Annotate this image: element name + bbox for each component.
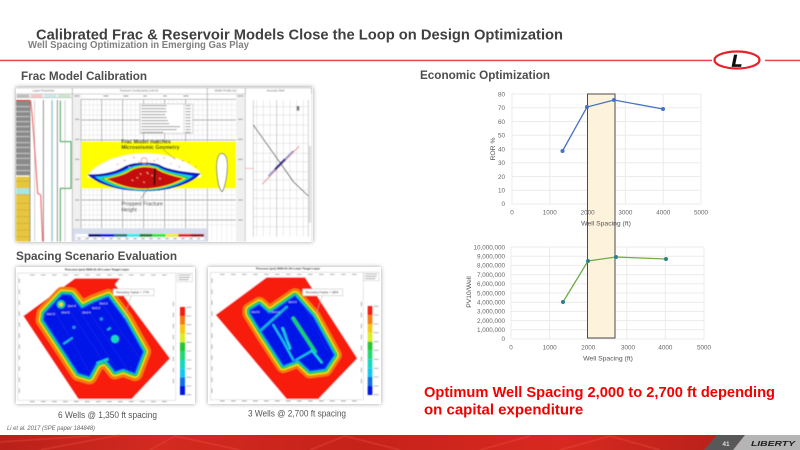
chart: PV10 vs well spacing: 1,000,000 <box>477 327 505 334</box>
heading: spacing scenario evaluation: Spacing Scenario Evaluation <box>16 249 177 263</box>
label: frac model matches: Frac Model matches <box>121 139 171 145</box>
depleted-area details <box>53 300 140 373</box>
pressure contours <box>250 296 334 371</box>
series: PV10 line <box>561 255 668 304</box>
callout: optimum well spacing: Optimum Well Spacing 2,000 to 2,700 ft depending <box>424 384 775 401</box>
chart: PV10 vs well spacing: 3000 <box>621 344 635 352</box>
chart: PV10 vs well spacing: 2000 <box>581 344 596 352</box>
chart: PV10 vs well spacing: 5,000,000 <box>477 290 505 298</box>
chart: PV10 vs well spacing: Well Spacing (ft) <box>583 356 633 362</box>
x-axis labels over highlight <box>581 210 631 228</box>
chart: PV10 vs well spacing: 0 <box>509 344 513 352</box>
well labels <box>251 300 297 314</box>
pressure colour scale <box>364 272 379 395</box>
pressure colour scale <box>177 273 192 395</box>
panel: 6 wells pressure map <box>16 267 195 404</box>
footer band <box>0 435 800 450</box>
page number tab: 41 <box>722 441 730 448</box>
label: propped fracture height: Height <box>121 208 137 214</box>
conductivity track grid: Acoustic Well <box>267 89 285 93</box>
conductivity track grid: Width Profile (in) <box>215 89 237 93</box>
title: Calibrated Frac & Reservoir Models Close the Loop on Design Optimization <box>36 28 563 44</box>
width profile shape <box>217 153 227 192</box>
panel: 6 wells pressure map: Pressure (psi) 2066-01-26 Lower Target Layer <box>65 268 130 272</box>
chart: ROR vs well spacing: 50 <box>498 132 505 140</box>
chart: PV10 vs well spacing: 3,000,000 <box>477 308 505 316</box>
chart: PV10 vs well spacing: 5000 <box>697 344 711 352</box>
brand tab <box>733 435 800 450</box>
conductivity track grid: Fracture Conductivity (mD-ft) <box>120 89 158 93</box>
callout: recovery factor 68% <box>303 289 343 317</box>
conductivity track grid <box>16 88 312 242</box>
chart: ROR vs well spacing: 4000 <box>656 210 671 216</box>
panel: 3 wells pressure map <box>208 267 381 404</box>
chart: ROR vs well spacing: ROR % <box>490 137 497 161</box>
chart: PV10 vs well spacing: 6,000,000 <box>477 281 505 288</box>
optimum range highlight <box>588 94 615 338</box>
red reservoir area <box>216 277 357 399</box>
chart: ROR vs well spacing: 70 <box>498 105 505 112</box>
chart: ROR vs well spacing: 40 <box>498 146 505 154</box>
well labels: Well 6 <box>47 312 55 316</box>
chart: PV10 vs well spacing: 8,000,000 <box>477 262 505 270</box>
callout: optimum well spacing: on capital expenditure <box>424 402 583 418</box>
well labels: Well 3 <box>99 301 108 305</box>
chart: PV10 vs well spacing: PV10/Well <box>466 276 473 308</box>
chart: PV10 vs well spacing: 0 <box>501 336 505 343</box>
acoustic well track <box>246 94 312 242</box>
yellow microseismic band <box>81 142 236 188</box>
chart: ROR vs well spacing: 0 <box>510 210 514 216</box>
chart: PV10 vs well spacing: 4000 <box>658 344 673 352</box>
callout: recovery factor 68%: Recovery Factor = 68% <box>305 290 339 294</box>
pressure contours <box>43 294 143 377</box>
callout: recovery factor 77% <box>113 289 154 318</box>
chart: ROR vs well spacing: 5000 <box>694 210 708 216</box>
panel: 3 wells pressure map: Pressure (psi) 2066-01-26 Lower Target Layer <box>256 267 321 271</box>
brand tab: LIBERTY <box>751 439 796 448</box>
leader lines <box>141 149 174 199</box>
chart: PV10 vs well spacing: 9,000,000 <box>477 254 505 260</box>
chart: ROR vs well spacing: 10 <box>498 188 505 194</box>
chart: ROR vs well spacing <box>490 92 708 216</box>
source citation: Li et al. 2017 (SPE paper 184848) <box>7 425 95 432</box>
panel: frac model screenshot <box>16 87 313 242</box>
results table <box>140 104 193 133</box>
chart: PV10 vs well spacing: 7,000,000 <box>477 272 505 279</box>
well labels: Well 4 <box>82 311 91 315</box>
series: ROR line <box>560 98 665 153</box>
well labels: Well 5 <box>251 310 260 314</box>
label: propped fracture height: Propped Fracture <box>121 201 163 207</box>
chart: PV10 vs well spacing: 4,000,000 <box>477 300 505 306</box>
propped height marker <box>152 168 157 185</box>
icon: company logo <box>714 52 760 70</box>
well labels: Well 3 <box>288 300 297 304</box>
red reservoir area <box>23 278 170 399</box>
well labels: Well 4 <box>68 304 76 308</box>
chart: PV10 vs well spacing: 1000 <box>543 344 557 352</box>
well labels <box>47 301 108 316</box>
well labels: Well 5 <box>61 311 70 315</box>
caption: 3 wells: 3 Wells @ 2,700 ft spacing <box>248 408 346 420</box>
x-axis labels over highlight: Well Spacing (ft) <box>581 220 631 228</box>
chart: ROR vs well spacing: 80 <box>498 92 505 98</box>
chart: ROR vs well spacing: 1000 <box>543 210 557 216</box>
page number tab <box>704 435 745 450</box>
chart: ROR vs well spacing: 30 <box>498 160 505 167</box>
x-axis labels over highlight: 2000 <box>581 210 595 216</box>
frac geometry lens <box>87 153 201 191</box>
layer properties track: Layer Properties <box>33 89 55 93</box>
chart: ROR vs well spacing: 20 <box>498 174 505 181</box>
chart: PV10 vs well spacing: 10,000,000 <box>473 244 505 252</box>
chart: PV10 vs well spacing: 2,000,000 <box>477 318 505 325</box>
layer properties track <box>16 89 72 242</box>
caption: 6 wells: 6 Wells @ 1,350 ft spacing <box>58 410 157 421</box>
well labels: Well 4 <box>271 310 280 314</box>
chart: PV10 vs well spacing <box>466 244 711 362</box>
heading: economic optimization: Economic Optimization <box>420 68 550 82</box>
conductivity legend <box>73 228 207 242</box>
chart: ROR vs well spacing: 0 <box>501 201 505 208</box>
chart: ROR vs well spacing: 3000 <box>618 210 633 216</box>
heading: frac model calibration: Frac Model Calibration <box>21 69 147 83</box>
interference streaks <box>260 305 328 362</box>
callout: recovery factor 77%: Recovery Factor = 77% <box>116 290 149 294</box>
microseismic events <box>117 157 197 168</box>
chart: ROR vs well spacing: 60 <box>498 119 505 126</box>
subtitle: Well Spacing Optimization in Emerging Gas Play <box>28 40 249 51</box>
well labels: Well 2 <box>92 306 101 310</box>
icon: company logo: L <box>732 52 742 70</box>
header rule <box>0 60 800 61</box>
label: frac model matches: Microseismic Geometry <box>121 145 180 151</box>
